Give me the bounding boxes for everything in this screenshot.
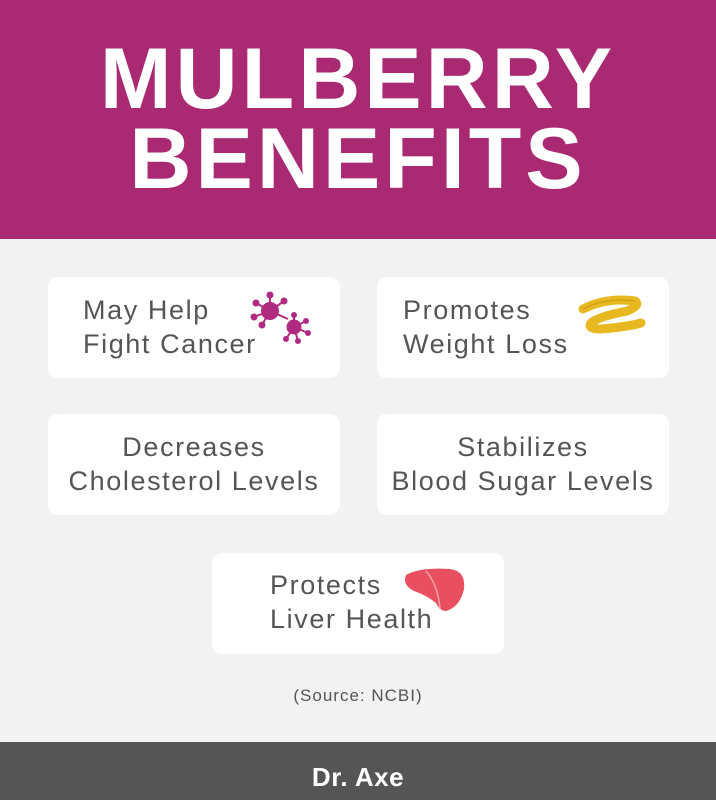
card: liver: Protects: [270, 570, 382, 600]
card: cancer: Fight Cancer: [83, 329, 257, 359]
card: cholesterol: Cholesterol Levels: [69, 466, 319, 496]
header banner: [0, 0, 716, 239]
card: weight loss: Weight Loss: [403, 329, 569, 359]
card: weight loss: [377, 277, 669, 378]
card: blood sugar: [377, 414, 669, 515]
card: blood sugar: Stabilizes: [457, 432, 589, 462]
card: cancer: [48, 277, 340, 378]
title: MULBERRY: [100, 31, 616, 127]
card: weight loss: Promotes: [403, 295, 531, 325]
card: liver: Liver Health: [270, 604, 433, 634]
icon: measuring tape: [578, 296, 646, 334]
card: liver: [212, 553, 504, 654]
icon: liver: [405, 568, 464, 611]
title: BENEFITS: [129, 111, 587, 207]
footer: [0, 742, 716, 800]
card: cancer: May Help: [83, 295, 210, 325]
footer brand: Dr. Axe: [312, 762, 404, 792]
card: cholesterol: [48, 414, 340, 515]
card: blood sugar: Blood Sugar Levels: [392, 466, 654, 496]
card: cholesterol: Decreases: [122, 432, 266, 462]
title: [100, 31, 616, 207]
source note: (Source: NCBI): [293, 686, 423, 705]
icon: virus: [250, 292, 311, 344]
